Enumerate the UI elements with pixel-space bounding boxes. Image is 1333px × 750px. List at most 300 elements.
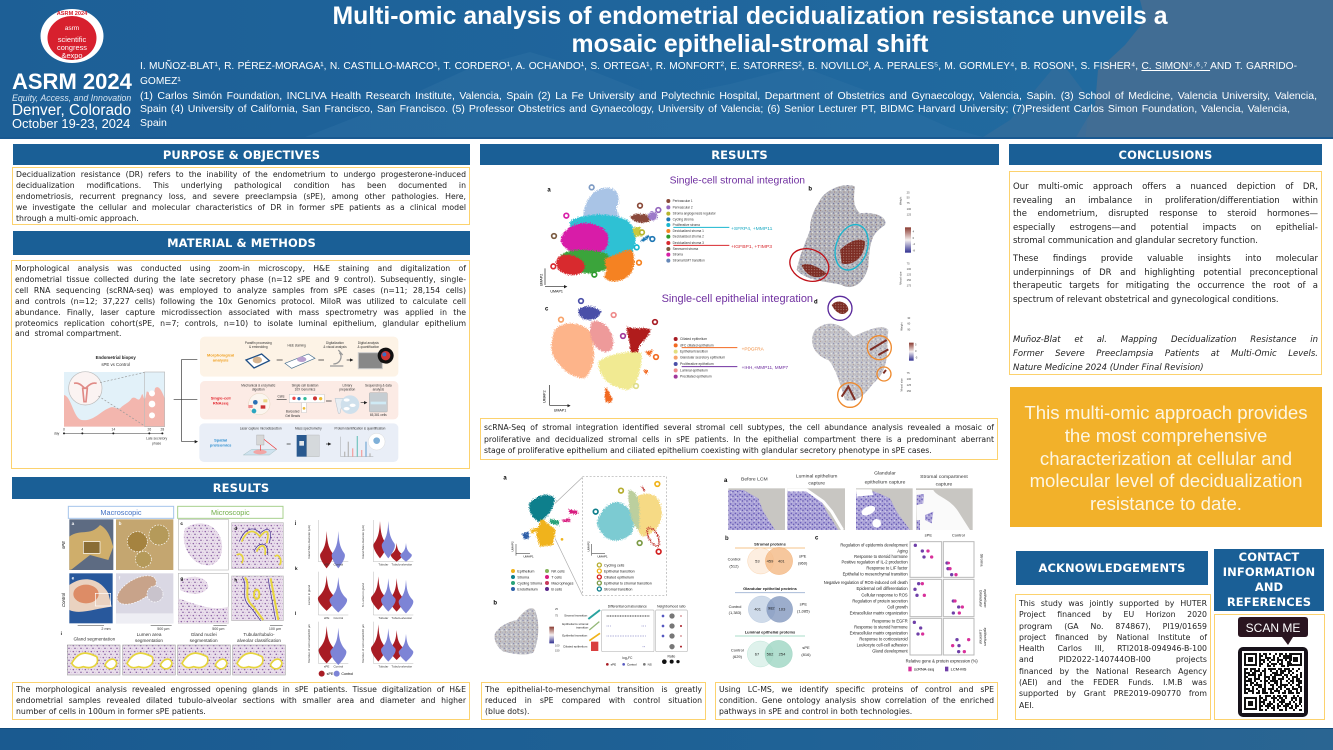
chart: violin plots: Control (334, 616, 343, 620)
poster title (332, 3, 1168, 58)
conference logo (40, 9, 104, 63)
chart: epithelial neighbourhood graph: 75 (907, 371, 910, 375)
legend: cell types: Epithelial transition (604, 569, 635, 573)
chart: stromal UMAP (539, 185, 661, 294)
chart: differential cell abundance: Ratio (667, 654, 675, 658)
text block: acknowledgements: project financed by National Institute of (1019, 633, 1207, 642)
panel: endometrial biopsy timeline: phase (152, 441, 161, 445)
panel: endometrial biopsy timeline: 0 (63, 428, 65, 432)
legend: cell types: B cells (551, 587, 562, 591)
panel: single-cell RNAseq: 10X Genomics (295, 387, 316, 391)
chart: differential cell abundance (493, 600, 687, 666)
panel: endometrial biopsy timeline (54, 355, 168, 445)
heading: purpose and objectives: PURPOSE & OBJECTIVES (163, 148, 320, 162)
conference logo: &expo (62, 51, 82, 60)
chart: stromal UMAP: a (547, 187, 551, 193)
panel: endometrial biopsy timeline: 28 (160, 428, 164, 432)
chart: cell atlas UMAP: UMAP2 (510, 541, 514, 552)
chart: pathway enrichment dot plot: c (815, 535, 819, 541)
chart: differential cell abundance: Epithelial transition (562, 634, 588, 638)
chart: protein Venn diagrams: (629) (733, 654, 743, 659)
annotation: ciliated markers (682, 346, 765, 351)
chart: epithelial neighbourhood graph: -5 (915, 356, 918, 360)
chart: differential cell abundance: Differential cell abundance (608, 604, 647, 608)
heading: results middle (480, 144, 999, 165)
chart: epithelial neighbourhood graph: 0 (915, 349, 917, 353)
affiliations: Spain (4) University of California, San Francisco, San Francisco. (5) Professor Obstetrics and Gynaecology, University of Valencia; (6) Senior Lecturer PT, BIDMC Harvard University; (7)President Carlos Simon Foundation, Valencia, Valencia, (140, 103, 1290, 115)
images: laser capture microscopy: a (724, 478, 728, 484)
chart: protein Venn diagrams: (860) (798, 561, 808, 566)
chart: pathway enrichment dot plot: Control (952, 533, 965, 538)
text block: morphological caption (12, 682, 470, 720)
text block: conclusions: Former Severe Preeclampsia Patients at Multi-Omic Levels. (1013, 349, 1318, 359)
legend: stromal subtypes: Perivascular 1 (673, 199, 693, 203)
chart: stromal neighbourhood graph: 75 (907, 262, 910, 266)
legend: cell types (511, 563, 652, 591)
legend: stromal subtypes: Stromal EMT transition (673, 259, 705, 263)
chart: violin plots: Lumen in gland (307, 584, 311, 605)
chart: protein Venn diagrams: sPE (802, 645, 810, 650)
panel: single-cell RNAseq: Single-cell (211, 395, 231, 400)
text block: LC-MS caption: condition. Gene ontology analysis show correlation of the enriched (719, 696, 994, 705)
text block: single-cell caption (480, 418, 998, 460)
figure: morphological analysis (61, 506, 413, 677)
images: control macroscopic: 2 mm (101, 627, 111, 631)
text block: purpose: Decidualization resistance (DR) refers to the inability of the endometrium to undergo progesterone-induced (16, 170, 466, 179)
chart: pathway enrichment dot plot: Luminal (978, 630, 983, 644)
text block: methods: Morphological analysis was conducted using zoom-in microscopy, H&E staining and digitalization of (15, 264, 466, 273)
chart: protein Venn diagrams: 67 (755, 651, 760, 656)
panel: morphological analysis: H&E staining (288, 344, 306, 348)
legend: cell types: Epithelial to stromal transition (604, 581, 652, 585)
chart: differential cell abundance: log₂FC (622, 656, 633, 660)
legend: cell types: Endothelium (517, 587, 538, 591)
images: microscopic histology: h (234, 578, 237, 583)
text block: conclusions: Muñoz-Blat et al. Mapping Decidualization Resistance in (1013, 335, 1318, 345)
chart: violin plots: % Lumen in gland (361, 583, 365, 607)
text block: epithelial transition caption: reduced in sPE compared with control situation (485, 696, 702, 705)
images: laser capture microscopy (724, 471, 973, 530)
legend: cell types: Stroma (517, 575, 530, 579)
chart: violin plots (294, 520, 413, 677)
chart: differential cell abundance: 75 (555, 614, 558, 618)
chart: cell atlas UMAP: UMAP1 (523, 554, 534, 558)
figure: cell atlas and differential abundance (493, 475, 687, 666)
chart: violin plots: Tubular (378, 664, 388, 668)
chart: stromal UMAP: UMAP1 (550, 290, 563, 294)
panel: spatial proteomics (199, 423, 398, 462)
images: segmentation row: alveolar classification (237, 638, 281, 643)
images: control macroscopic: Control (61, 592, 66, 607)
text block: conclusions: underpinnings of DR and highlighting potential preconceptional (1013, 268, 1318, 278)
callout: key message: molecular level of decidualization (1030, 470, 1302, 491)
text block: acknowledgements: financed by the National Research Agency (1019, 667, 1207, 676)
legend: stromal subtypes: Decidualized stroma 2 (673, 235, 704, 239)
chart: pathway enrichment dot plot: Response to corticosteroid (859, 637, 908, 642)
chart: violin plots: l (295, 611, 296, 616)
chart: epithelial neighbourhood graph: 5 (915, 342, 917, 346)
chart: pathway enrichment dot plot: Epidermal cell differentiation (857, 586, 908, 591)
legend: stromal subtypes: Decidualized stroma 1 (673, 229, 704, 233)
label: microscopic (178, 506, 283, 518)
chart: pathway enrichment dot plot: Regulation of protein secretion (852, 599, 908, 604)
conference name and place: Equity, Access, and Innovation (12, 93, 131, 103)
text block: conclusions: These findings provide valuable insights into molecular (1013, 254, 1318, 264)
chart: protein Venn diagrams: (512) (729, 563, 739, 568)
panel: single-cell RNAseq: RNAseq (213, 400, 229, 405)
text block: methods (11, 260, 470, 469)
legend: stromal subtypes: Perivascular 2 (673, 205, 693, 209)
panel: morphological analysis (200, 337, 398, 377)
text block: acknowledgements: AEI. (1019, 701, 1034, 710)
images: segmentation row: Gland segmentation (73, 637, 116, 642)
text block: acknowledgements: Project financed by EU Horizon 2020 (1019, 610, 1207, 619)
panel: single-cell RNAseq: Single cell isolation (292, 383, 319, 387)
chart: pathway enrichment dot plot: Extracellular matrix organization (850, 611, 908, 616)
images: segmentation row: i (61, 631, 62, 636)
chart: violin plots: sPE (324, 616, 329, 620)
chart: pathway enrichment dot plot: Response to LIF factor (866, 565, 908, 570)
chart: epithelial neighbourhood graph: Weight (900, 322, 904, 331)
text block: acknowledgements: and PID2022-140744OB-I00 projects (1019, 655, 1207, 664)
chart: violin plots: Number of cell nuclei/100 µm (307, 623, 311, 663)
text block: conclusions: spectrum of relevant obstetrical and gynecological conditions. (1013, 295, 1279, 305)
chart: protein Venn diagrams (725, 536, 811, 668)
legend: epithelial subtypes: Epithelial transition (680, 350, 708, 354)
images: segmentation row (61, 631, 285, 675)
chart: epithelial neighbourhood graph: 125 (907, 383, 912, 387)
panel: spatial proteomics: proteomics (210, 442, 232, 447)
chart: epithelial UMAP: c (545, 307, 549, 313)
legend: cell types: Macrophages (551, 581, 574, 585)
chart: pathway enrichment dot plot: Gland development (872, 649, 909, 654)
affiliations (140, 90, 1317, 129)
chart: protein Venn diagrams: Luminal epithelial proteins (745, 629, 796, 634)
chart: protein Venn diagrams: sPE (800, 602, 807, 607)
chart: violin plots: Tubular (378, 563, 388, 567)
images: segmentation row: segmentation (190, 638, 218, 643)
heading: acknowledgements (1016, 551, 1208, 585)
legend: stromal subtypes (666, 199, 716, 263)
panel: morphological analysis: Morphological (207, 352, 234, 357)
chart: stromal neighbourhood graph: -8 (913, 249, 916, 253)
panel: single-cell RNAseq: Library (343, 383, 353, 387)
chart: pathway enrichment dot plot: epithelium (983, 589, 988, 608)
panel: single-cell RNAseq: Sequencing & data (365, 383, 392, 387)
chart: pathway enrichment dot plot: epithelium (983, 628, 988, 646)
images: microscopic histology: d (234, 526, 237, 531)
panel: endometrial biopsy timeline: 14 (111, 428, 115, 432)
chart: protein Venn diagrams: 562 (767, 651, 774, 656)
legend: cell types: Stromal transition (604, 587, 632, 591)
legend: cell types: NK cells (551, 569, 565, 573)
panel: single-cell RNAseq: 65,381 cells (370, 413, 387, 417)
legend: cell types: Ciliated epithelium (604, 575, 634, 579)
chart: protein Venn diagrams: (816) (801, 652, 811, 657)
text block: conclusions: Nature Medicine 2024 (Under Final Revision) (1013, 363, 1204, 373)
chart: stromal neighbourhood graph: Nhood size (899, 271, 903, 285)
chart: pathway enrichment dot plot: Aging (897, 548, 908, 553)
images: segmentation row: Tubular/tubulo- (243, 632, 275, 637)
legend: cell types: T cells (551, 575, 562, 579)
heading: results left: RESULTS (213, 481, 269, 495)
images: microscopic histology: c (180, 521, 183, 526)
chart: pathway enrichment dot plot: Cell growth (887, 605, 908, 610)
chart: pathway enrichment dot plot: Extracellular matrix organization (850, 631, 908, 636)
chart: violin plots: Number of cell nuclei/100 µm (361, 623, 365, 663)
legend: stromal subtypes: Senescent stroma (673, 247, 698, 251)
images: control macroscopic: 500 µm (212, 627, 224, 631)
chart: stromal neighbourhood graph: b (808, 187, 812, 193)
text block: acknowledgements: This study was jointly supported by HUTER (1019, 599, 1207, 608)
chart: violin plots: Tubulo-alveolar (391, 664, 412, 668)
chart: protein Venn diagrams: b (725, 536, 729, 542)
heading: material and methods (13, 231, 470, 255)
images: segmentation row: Lumen area (137, 632, 162, 637)
authors: I. MUÑOZ-BLAT¹, R. PÉREZ-MORAGA¹, N. CASTILLO-MARCO¹, T. CORDERO¹, A. OCHANDO¹, S. ORTEGA¹, R. MONFORT², E. SATORRES², B. NOVILLO², A. PERALES⁵, M. GORMLEY⁴, B. ROSON¹, S. FISHER⁴, C. SIMON⁵˒⁶˒⁷ AND T. GARRIDO- (140, 61, 1297, 72)
text block: purpose (12, 167, 470, 225)
chart: epithelial neighbourhood graph: 60 (907, 321, 911, 325)
chart: cell atlas UMAP: UMAP1 (597, 554, 608, 558)
text block: methods: abundance. Finally, laser capture microdissection associated with mass spectrometry was applied in the (15, 308, 466, 317)
chart: differential cell abundance: 25 (555, 607, 558, 611)
chart: pathway enrichment dot plot: LCM-MS (951, 666, 967, 671)
chart: violin plots: Control (334, 563, 343, 567)
annotation: proliferative markers (673, 226, 773, 232)
legend: stromal subtypes: Cycling stroma (673, 217, 694, 221)
text block: purpose: we investigate the cellular and molecular characteristics of DR in former sPE patients as a clinical model (16, 203, 466, 212)
conference name and place: October 19-23, 2024 (12, 116, 130, 131)
conference logo: scientific (58, 35, 86, 44)
text block: conclusions: revealing an imbalance in proliferation/differentiation within (1013, 196, 1318, 206)
chart: epithelial neighbourhood graph: Nhood size (900, 378, 904, 392)
images: laser capture microscopy: Glandular (874, 471, 896, 477)
chart: stromal neighbourhood graph: 25 (907, 190, 910, 194)
header banner (0, 0, 1333, 139)
panel: QR contact (1214, 614, 1325, 720)
legend: stromal subtypes: Stroma (673, 253, 683, 257)
text block: purpose: decidualization modifications. This underlying pathological condition has been documented in (16, 181, 466, 190)
text block: LC-MS caption (715, 682, 998, 720)
chart: differential cell abundance: 100 (555, 644, 560, 648)
chart: stromal neighbourhood graph: 100 (907, 267, 912, 271)
chart: stromal UMAP: UMAP2 (539, 274, 543, 286)
chart: differential cell abundance: sPE (611, 662, 616, 666)
chart: epithelial neighbourhood graph: 90 (907, 328, 911, 332)
text block: LC-MS caption: pathways in sPE and control in both technologies. (719, 707, 912, 716)
authors: GOMEZ¹ (140, 76, 181, 86)
chart: pathway enrichment dot plot: Response to steroid hormone (854, 554, 908, 559)
heading: material and methods: MATERIAL & METHODS (167, 236, 316, 250)
conference name and place (12, 69, 132, 131)
panel: single-cell RNAseq: Barcoded (286, 409, 300, 413)
conference logo: asrm (65, 25, 79, 32)
panel: spatial proteomics: Laser capture microdissection (240, 426, 282, 430)
conference logo: congress (57, 43, 87, 52)
chart: stromal neighbourhood graph: 150 (907, 278, 912, 282)
chart: violin plots: sPE (327, 672, 334, 676)
chart: pathway enrichment dot plot: Leukocyte cell-cell adhesion (857, 643, 908, 648)
heading: conclusions: CONCLUSIONS (1119, 148, 1212, 162)
text block: epithelial transition caption: The epithelial-to-mesenchymal transition is greatly (485, 685, 702, 694)
chart: stromal neighbourhood graph: 125 (907, 213, 912, 217)
chart: pathway enrichment dot plot (815, 533, 988, 671)
legend: epithelial subtypes: Glandular secretory epithelium (680, 356, 725, 360)
chart: stromal neighbourhood graph: -4 (913, 242, 916, 246)
chart: protein Venn diagrams: 254 (779, 651, 786, 656)
images: segmentation row: Gland nuclei (191, 632, 217, 637)
chart: differential cell abundance: transition (576, 626, 589, 630)
chart: stromal neighbourhood graph: 4 (913, 229, 915, 233)
images: laser capture microscopy: capture (936, 481, 953, 487)
chart: pathway enrichment dot plot: Positive regulation of IL-2 production (841, 560, 908, 565)
text block: single-cell caption: scRNA-Seq of stromal integration identified several stromal cell subtypes, the cell abundance analysis revealed a mosaic of (484, 423, 994, 432)
images: laser capture microscopy: epithelium capture (865, 479, 906, 485)
chart: stromal neighbourhood graph: 100 (907, 207, 912, 211)
annotation: decidualized markers (673, 244, 772, 250)
poster title: mosaic epithelial-stromal shift (572, 31, 928, 58)
panel: morphological analysis: Paraffin processing (245, 341, 272, 345)
conference logo: ASRM 2024 (57, 11, 88, 17)
legend: epithelial subtypes: dFC ciliated epithelium (680, 343, 714, 347)
panel: endometrial biopsy timeline: Late secretory (146, 436, 168, 440)
text block: epithelial transition caption: (blue dots). (485, 707, 529, 716)
images: microscopic histology: g (180, 576, 183, 581)
chart: protein Venn diagrams: 401 (754, 607, 762, 612)
panel: single-cell RNAseq: Cells (277, 394, 285, 398)
heading: acknowledgements: ACKNOWLEDGEMENTS (1038, 561, 1186, 575)
arrows: workflow branches (174, 359, 197, 442)
panel: endometrial biopsy timeline: 4 (81, 428, 83, 432)
callout: key message (1010, 387, 1322, 527)
chart: protein Venn diagrams: 982 (768, 605, 775, 610)
heading: contact information: CONTACT INFORMATION AND REFERENCES (1223, 550, 1315, 609)
chart: cell atlas UMAP: a (503, 475, 507, 481)
chart: violin plots: Control (334, 664, 343, 668)
chart: protein Venn diagrams: Control (731, 647, 744, 652)
text block: single-cell caption: stage of proliferative epithelium and ciliated epithelium coexisting with glandular secretory phenotype in sPE cases. (484, 446, 932, 455)
images: laser capture microscopy: Before LCM (741, 477, 768, 483)
chart: pathway enrichment dot plot: Response to steroid hormone (854, 624, 908, 629)
text block: acknowledgements: Health Carlos III, RTI2018-094946-B-100 (1019, 644, 1207, 653)
images: laser capture microscopy: Stromal compartment (920, 474, 968, 480)
label: macroscopic (68, 506, 174, 518)
text block: conclusions: stromal communication and glandular secretory function. (1013, 236, 1258, 246)
annotation: proliferative epithelial markers: +IHH,+MMP11, MMP7 (742, 365, 789, 370)
chart: pathway enrichment dot plot: Cellular response to ROS (861, 593, 908, 598)
text block: acknowledgements: (AEI) and the FEDER Funds. I.M.B was (1019, 678, 1207, 687)
chart title: stromal integration: Single-cell stromal integration (670, 175, 805, 186)
text block: morphological caption: number of cells in 100um in former sPE patients. (16, 707, 206, 716)
legend: epithelial subtypes: Luminal epithelium (680, 368, 708, 372)
text block: methods: and stromal compartment. (15, 329, 121, 338)
panel: morphological analysis: analysis (213, 357, 229, 362)
chart: pathway enrichment dot plot: sPE (925, 533, 932, 538)
text block: methods: endometrial tissue collected during the late secretory phase (n=12 sPE and 9 control). Subsequently, single- (15, 275, 466, 284)
affiliations: (1) Carlos Simón Foundation, INCLIVA Health Research Institute, Valencia, Spain (2) La Fe University and Polytechnic Hospital, Department of Obstetrics and Gynaecology, Valencia, Sapin. (3) School of Medicine, Valencia University, Valencia, (140, 90, 1317, 102)
chart: differential cell abundance: 150 (555, 649, 560, 653)
chart: protein Venn diagrams: Glandular epithelial proteins (743, 586, 798, 591)
legend: stromal subtypes: Proliferative stroma (673, 223, 700, 227)
chart: violin plots: Tubulo-alveolar (391, 616, 412, 620)
chart: protein Venn diagrams: 103 (779, 607, 786, 612)
conference name and place: Denver, Colorado (12, 102, 131, 119)
text block: single-cell caption: proliferative and decidualized stromal cells in sPE patients. In the epithelial compartment there is a predominant aberrant (484, 435, 994, 444)
chart: differential cell abundance: Neighborhood ratio (657, 604, 686, 608)
text block: conclusions: especially estrogens—and potential impacts on epithelial- (1013, 223, 1318, 233)
chart: pathway enrichment dot plot: scRNA-seq (914, 666, 934, 671)
chart: protein Venn diagrams: 401 (778, 558, 785, 563)
images: control macroscopic: 500 µm (157, 627, 169, 631)
callout: key message: characterization at cellular and (1040, 448, 1292, 469)
callout: key message: the most comprehensive (1065, 425, 1267, 446)
annotation: proliferative epithelial markers (682, 365, 789, 370)
panel: endometrial biopsy timeline: 26 (147, 428, 151, 432)
chart: stromal neighbourhood graph (785, 185, 916, 288)
chart: pathway enrichment dot plot: Stroma (980, 554, 985, 567)
icon: QR code (1238, 647, 1308, 717)
images: control macroscopic: f (119, 575, 121, 580)
chart: pathway enrichment dot plot: Regulation of epidermis development (840, 543, 909, 548)
annotation: proliferative markers: +SFRP4, +MMP11 (731, 226, 773, 232)
panel: spatial proteomics: Mass spectrometry (295, 426, 322, 430)
chart: epithelial UMAP: UMAP1 (554, 409, 566, 413)
figure: single-cell integration (539, 175, 918, 413)
images: sPE macroscopic: b (119, 521, 122, 526)
panel: endometrial biopsy timeline: sPE vs Control (101, 362, 130, 367)
panel: single-cell RNAseq: analysis (373, 387, 384, 391)
conference name and place: ASRM 2024 (12, 69, 132, 94)
legend: epithelial subtypes (674, 337, 725, 379)
chart: differential cell abundance: Ciliated epithelium (563, 644, 588, 648)
chart title: epithelial integration: Single-cell epithelial integration (662, 293, 813, 305)
chart: stromal neighbourhood graph: 175 (907, 284, 912, 288)
legend: epithelial subtypes: Proliferative epithelium (680, 362, 714, 366)
authors (140, 60, 1297, 86)
annotation: ciliated markers: +PDGFRA (742, 346, 765, 351)
text block: morphological caption: endometrial samples revealed dilated tubulo-alveolar sections with smaller area and diameter and higher (16, 696, 466, 705)
chart: differential cell abundance: Epithelial to stromal (562, 622, 589, 626)
text block: conclusions: Our multi-omic approach offers a nuanced depiction of DR, (1013, 182, 1318, 192)
heading: results left (12, 477, 470, 499)
label: microscopic: Microscopic (211, 508, 250, 517)
panel: morphological analysis: Digital analysis (358, 341, 379, 345)
images: laser capture microscopy: Luminal epithelium (796, 473, 837, 479)
chart: pathway enrichment dot plot: Glandular (978, 590, 983, 608)
chart: protein Venn diagrams: (1,085) (797, 609, 810, 614)
panel: single-cell RNAseq: digestion (252, 387, 265, 391)
chart: protein Venn diagrams: Stromal proteins (754, 541, 787, 546)
chart: protein Venn diagrams: Control (728, 557, 741, 562)
panel: single-cell RNAseq: preparation (339, 387, 356, 391)
chart: cell atlas UMAP: UMAP2 (586, 541, 590, 552)
chart: protein Venn diagrams: 53 (755, 558, 760, 563)
chart: differential cell abundance: Control (627, 662, 637, 666)
chart: cell atlas UMAP (503, 475, 667, 595)
text block: methods: and controls (n=12; 37,227 cells) following the 10x Genomics protocol. MiloR was utilized to calculate cell (15, 297, 466, 306)
chart: stromal neighbourhood graph: 50 (907, 196, 910, 200)
chart: epithelial UMAP: UMAP2 (543, 390, 547, 403)
images: laser capture microscopy: capture (808, 481, 825, 487)
images: sPE macroscopic: a (72, 521, 75, 526)
text block: conclusions: therapeutic targets for mitigating the occurrence the root of a (1013, 281, 1318, 291)
label: macroscopic: Macroscopic (100, 508, 142, 517)
poster title: Multi-omic analysis of endometrial decidualization resistance unveils a (332, 3, 1168, 30)
text block: acknowledgements: program (GA No. 874867), PI19/01659 (1019, 622, 1207, 631)
chart: epithelial neighbourhood graph: 100 (907, 377, 912, 381)
chart: violin plots: k (295, 566, 298, 571)
chart: pathway enrichment dot plot: Negative regulation of ROS-induced cell death (824, 580, 908, 585)
